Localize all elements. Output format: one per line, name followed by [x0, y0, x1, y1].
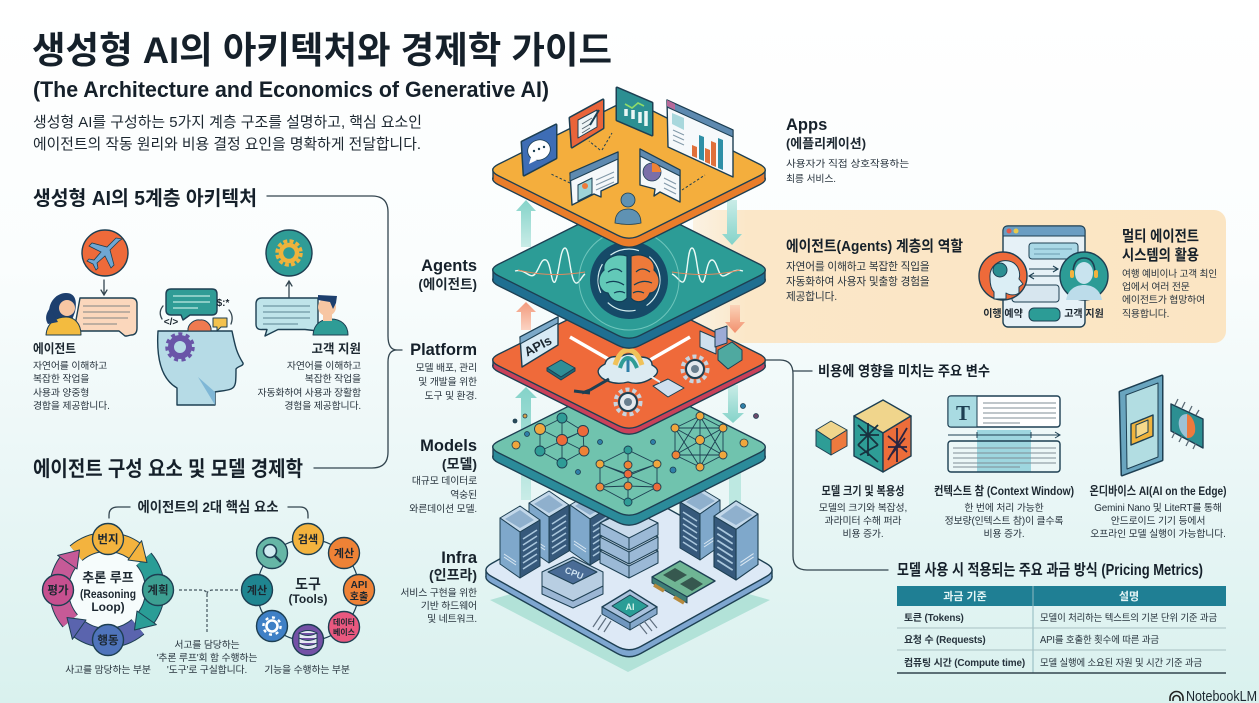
diagram: tools ring: 도구 [295, 576, 321, 592]
diagram: tools ring: 데이터 [333, 617, 355, 627]
icon: APIs window: APIs [522, 333, 554, 359]
text: on-device AI [1090, 484, 1226, 540]
ai chip: AI [626, 602, 634, 612]
layer label: platform: 및 개발을 위한 [418, 375, 477, 388]
cpu block: CPU [563, 565, 585, 581]
table: pricing metrics: 과금 기준 [943, 589, 987, 603]
text: context window: 컨텍스트 참 (Context Window) [934, 483, 1074, 498]
connector: left headings to platform [267, 196, 402, 468]
diagram: reasoning loop: 번지 [97, 533, 119, 546]
text: multi-agent systems: 시스템의 활용 [1122, 247, 1199, 264]
table: pricing metrics [897, 586, 1226, 673]
layer label: agents: (에이전트) [418, 277, 477, 292]
layer label: models: (모델) [442, 456, 477, 472]
diagram: tools ring [242, 524, 374, 656]
captions under diagrams: '도구'로 구실합니다. [167, 664, 247, 676]
text: multi-agent systems: 여행 예비이나 고객 최인 [1122, 268, 1217, 280]
text: multi-agent systems [1122, 227, 1217, 320]
cpu block [542, 557, 603, 608]
icon: gear lower [616, 390, 640, 414]
diagram: tools ring: 호출 [350, 591, 368, 603]
layer label: platform: 도구 및 환경. [425, 389, 477, 402]
layer: infra [486, 488, 772, 657]
text: multi-agent systems: 에이전트가 협망하여 [1122, 293, 1205, 306]
icon: context window: T [956, 401, 970, 425]
server racks [500, 488, 758, 580]
text: model size: 과라미터 수해 퍼라 [825, 514, 901, 527]
diagram: tools ring: 계산 [247, 583, 267, 597]
illustration: multi-agent window: 이행 예약 [983, 307, 1023, 320]
diagram: tools ring: (Tools) [288, 592, 328, 606]
diagram: reasoning loop [42, 524, 174, 656]
text: customer support [258, 342, 361, 412]
icon: teal support badge [1060, 252, 1108, 300]
icon: tag [650, 376, 684, 397]
text: model size: 모델의 크기와 복잡성, [819, 502, 907, 514]
intro text: 에이전트의 작동 원리와 비용 결정 요인을 명확하게 전달합니다. [33, 136, 421, 153]
captions under diagrams: 기능을 수행하는 부분 [264, 663, 350, 676]
icon: editor tile [570, 100, 603, 147]
icon: cloud hub [598, 350, 658, 383]
text: customer support: 경험을 제공합니다. [284, 399, 361, 412]
layer label: models: 대규모 데이터로 [412, 475, 477, 487]
icon: profile window [570, 152, 618, 205]
layer label: models: 와른데이션 모델. [409, 503, 477, 515]
text: multi-agent systems: 업에서 여러 전문 [1122, 280, 1190, 293]
layer: platform [493, 292, 765, 434]
illustration: head with ideas: </> [164, 317, 178, 328]
text: agents layer role: 자연어를 이해하고 복잡한 직입을 [786, 260, 930, 273]
heading: agent components and model economics: 에이전트 구성 요소 및 모델 경제학 [33, 458, 303, 481]
illustration: agent with travel booking [46, 230, 137, 336]
icon: user [615, 193, 641, 224]
icon: dashboard window [667, 100, 733, 177]
icon: pie window [640, 149, 680, 202]
layer: models [493, 379, 765, 525]
icon: on-device phone and chip [1120, 376, 1203, 475]
icon: model cubes [816, 400, 911, 472]
text: multi-agent systems: 멀티 에이전트 [1122, 227, 1199, 245]
intro text [33, 114, 422, 153]
layer: agents [493, 202, 765, 348]
illustration: head with ideas [158, 289, 243, 405]
text: agent: 자연어를 이해하고 [33, 359, 107, 372]
layer label: agents: Agents [421, 257, 477, 275]
table: pricing metrics: API를 호출한 횟수에 따른 과금 [1040, 634, 1159, 646]
storage stack [600, 509, 658, 578]
dashed connector between loop and tools [179, 590, 239, 632]
scattered nodes [512, 404, 758, 474]
text: model size: 비용 증가. [843, 528, 883, 540]
gpu board [652, 561, 715, 603]
title: 생성형 AI의 아키텍처와 경제학 가이드 [32, 30, 612, 71]
panel: agents role highlight [693, 210, 1226, 343]
text: agent [33, 342, 110, 412]
captions under diagrams: 사고를 맘당하는 부분 [65, 663, 151, 676]
icon: APIs window [520, 317, 558, 367]
diagram: tools ring: 베이스 [333, 627, 356, 637]
text: customer support: 자연어를 이해하고 [287, 359, 361, 372]
captions under diagrams: '추론 루프'회 함 수행하는 [157, 651, 257, 664]
text: on-device AI: 오프라인 모델 실행이 가능합니다. [1090, 528, 1226, 540]
text: agents layer role: 자동화하여 사용자 및출항 경험을 [786, 275, 930, 288]
subtitle: (The Architecture and Economics of Generative AI) [33, 77, 549, 102]
heading: cost variables: 비용에 영향을 미치는 주요 변수 [818, 363, 990, 379]
diagram: reasoning loop: 계획 [147, 583, 169, 597]
icon: gear right [682, 356, 708, 382]
connector: platform to cost section [766, 360, 888, 570]
text: context window: 정보량(인텍스트 참)이 클수록 [945, 515, 1063, 527]
dashed flow arrows [551, 133, 705, 190]
text: agent: 에이전트 [33, 342, 76, 356]
text: model size: 모델 크기 및 복용성 [822, 483, 904, 498]
text: model size [819, 483, 907, 540]
diagram: tools ring: 계산 [334, 546, 354, 560]
text: on-device AI: 온디바이스 AI(AI on the Edge) [1090, 484, 1226, 498]
network: center [596, 446, 661, 506]
icon: boxes [700, 326, 742, 369]
text: context window [934, 483, 1074, 540]
text: customer support: 고객 지원 [312, 342, 361, 356]
layer label: platform: 모델 배포, 관리 [416, 362, 477, 374]
table: pricing metrics: 모델이 처리하는 텍스트의 기본 단위 기준 과금 [1040, 611, 1217, 624]
diagram: reasoning loop: 행동 [97, 633, 119, 647]
heading: 5-layer architecture: 생성형 AI의 5계층 아키텍처 [33, 187, 257, 210]
text: multi-agent systems: 직용합니다. [1122, 308, 1169, 320]
subheading with bracket: 에이전트의 2대 핵심 요소 [138, 499, 279, 515]
layer label: models [409, 437, 477, 515]
layer shadow [490, 560, 770, 672]
layer label: apps: 사용자가 직접 상호작용하는 [786, 157, 909, 170]
diagram: tools ring: 검색 [298, 533, 318, 546]
diagram: reasoning loop: Loop) [91, 600, 125, 614]
text: agents layer role: 제공합니다. [786, 291, 837, 303]
layer label: infra: Infra [441, 549, 478, 567]
layer label: apps: (에플리케이션) [786, 136, 866, 151]
layer label: apps: 최릉 서비스. [786, 173, 836, 185]
text: context window: 한 번에 처리 가능한 [964, 502, 1044, 514]
illustration: customer support [256, 230, 348, 336]
layer label: apps: Apps [786, 116, 827, 134]
table: pricing metrics: 설명 [1119, 590, 1139, 603]
captions under diagrams: 서고를 담당하는 [174, 638, 240, 651]
layer: apps [493, 88, 765, 247]
network: left [534, 413, 589, 468]
network: right [671, 412, 727, 471]
pulse waves [515, 248, 743, 283]
diagram: reasoning loop: 평가 [47, 583, 69, 597]
layer label: platform: Platform [410, 341, 477, 359]
text: on-device AI: 안드로이드 기기 등에서 [1111, 515, 1205, 527]
table: pricing metrics: 요청 수 (Requests) [904, 633, 986, 646]
layer label: infra [400, 549, 478, 625]
layer label: infra: 서비스 구현을 위한 [400, 586, 477, 599]
text: agent: 복잡한 작업을 [33, 372, 89, 385]
illustration: head with ideas: $:* [217, 298, 229, 309]
text: context window: 비용 증가. [984, 528, 1024, 540]
icon: chat tile [522, 125, 556, 175]
icon: wrench [574, 379, 609, 393]
diagram: tools ring: API [351, 580, 368, 591]
icon: orange agent badge [979, 252, 1027, 300]
heading: pricing metrics: 모델 사용 시 적용되는 주요 과금 방식 (Pricing Metrics) [897, 561, 1203, 579]
flow arrows between layers [515, 200, 745, 510]
diagram: reasoning loop: 추론 루프 [82, 570, 134, 585]
icon: chart tile [617, 88, 652, 135]
icon: chip [547, 360, 575, 380]
layer label: apps [786, 116, 909, 185]
layer label: infra: 기반 하드웨어 [421, 599, 477, 612]
illustration: multi-agent window: 고객 지원 [1064, 307, 1104, 320]
text: customer support: 자동화하여 사용과 장활함 [258, 386, 361, 399]
captions under diagrams [65, 638, 350, 676]
subheading with bracket [109, 499, 308, 518]
table: pricing metrics: 컴퓨팅 시간 (Compute time) [904, 657, 1025, 669]
text: customer support: 복잡한 작업을 [305, 372, 361, 385]
icon: white arrows [570, 337, 690, 360]
icon: context window [948, 396, 1060, 472]
layer label: infra: (인프라) [429, 567, 477, 583]
layer label: models: 역숭된 [450, 489, 477, 501]
ai chip [593, 590, 657, 634]
diagram: reasoning loop: (Reasoning [80, 587, 136, 601]
layer label: platform [410, 341, 477, 402]
intro text: 생성형 AI를 구성하는 5가지 계층 구조를 설명하고, 핵심 요소인 [33, 114, 422, 131]
illustration: multi-agent window [979, 226, 1108, 327]
table: pricing metrics: 모델 실행에 소요된 자원 및 시간 기준 과금 [1040, 657, 1202, 669]
table: pricing metrics: 토큰 (Tokens) [904, 612, 964, 624]
text: agents layer role: 에이전트(Agents) 계층의 역할 [786, 238, 963, 255]
text: agent: 경합을 제공합니다. [33, 399, 110, 412]
layer label: models: Models [420, 437, 477, 455]
text: agent: 사용과 양중형 [33, 387, 89, 399]
layer label: infra: 및 네트워크. [427, 612, 477, 625]
layer label: agents [418, 257, 477, 292]
text: agents layer role [786, 238, 963, 303]
text: on-device AI: Gemini Nano 및 LiteRT를 통해 [1094, 501, 1222, 514]
icon: brain [579, 230, 679, 330]
